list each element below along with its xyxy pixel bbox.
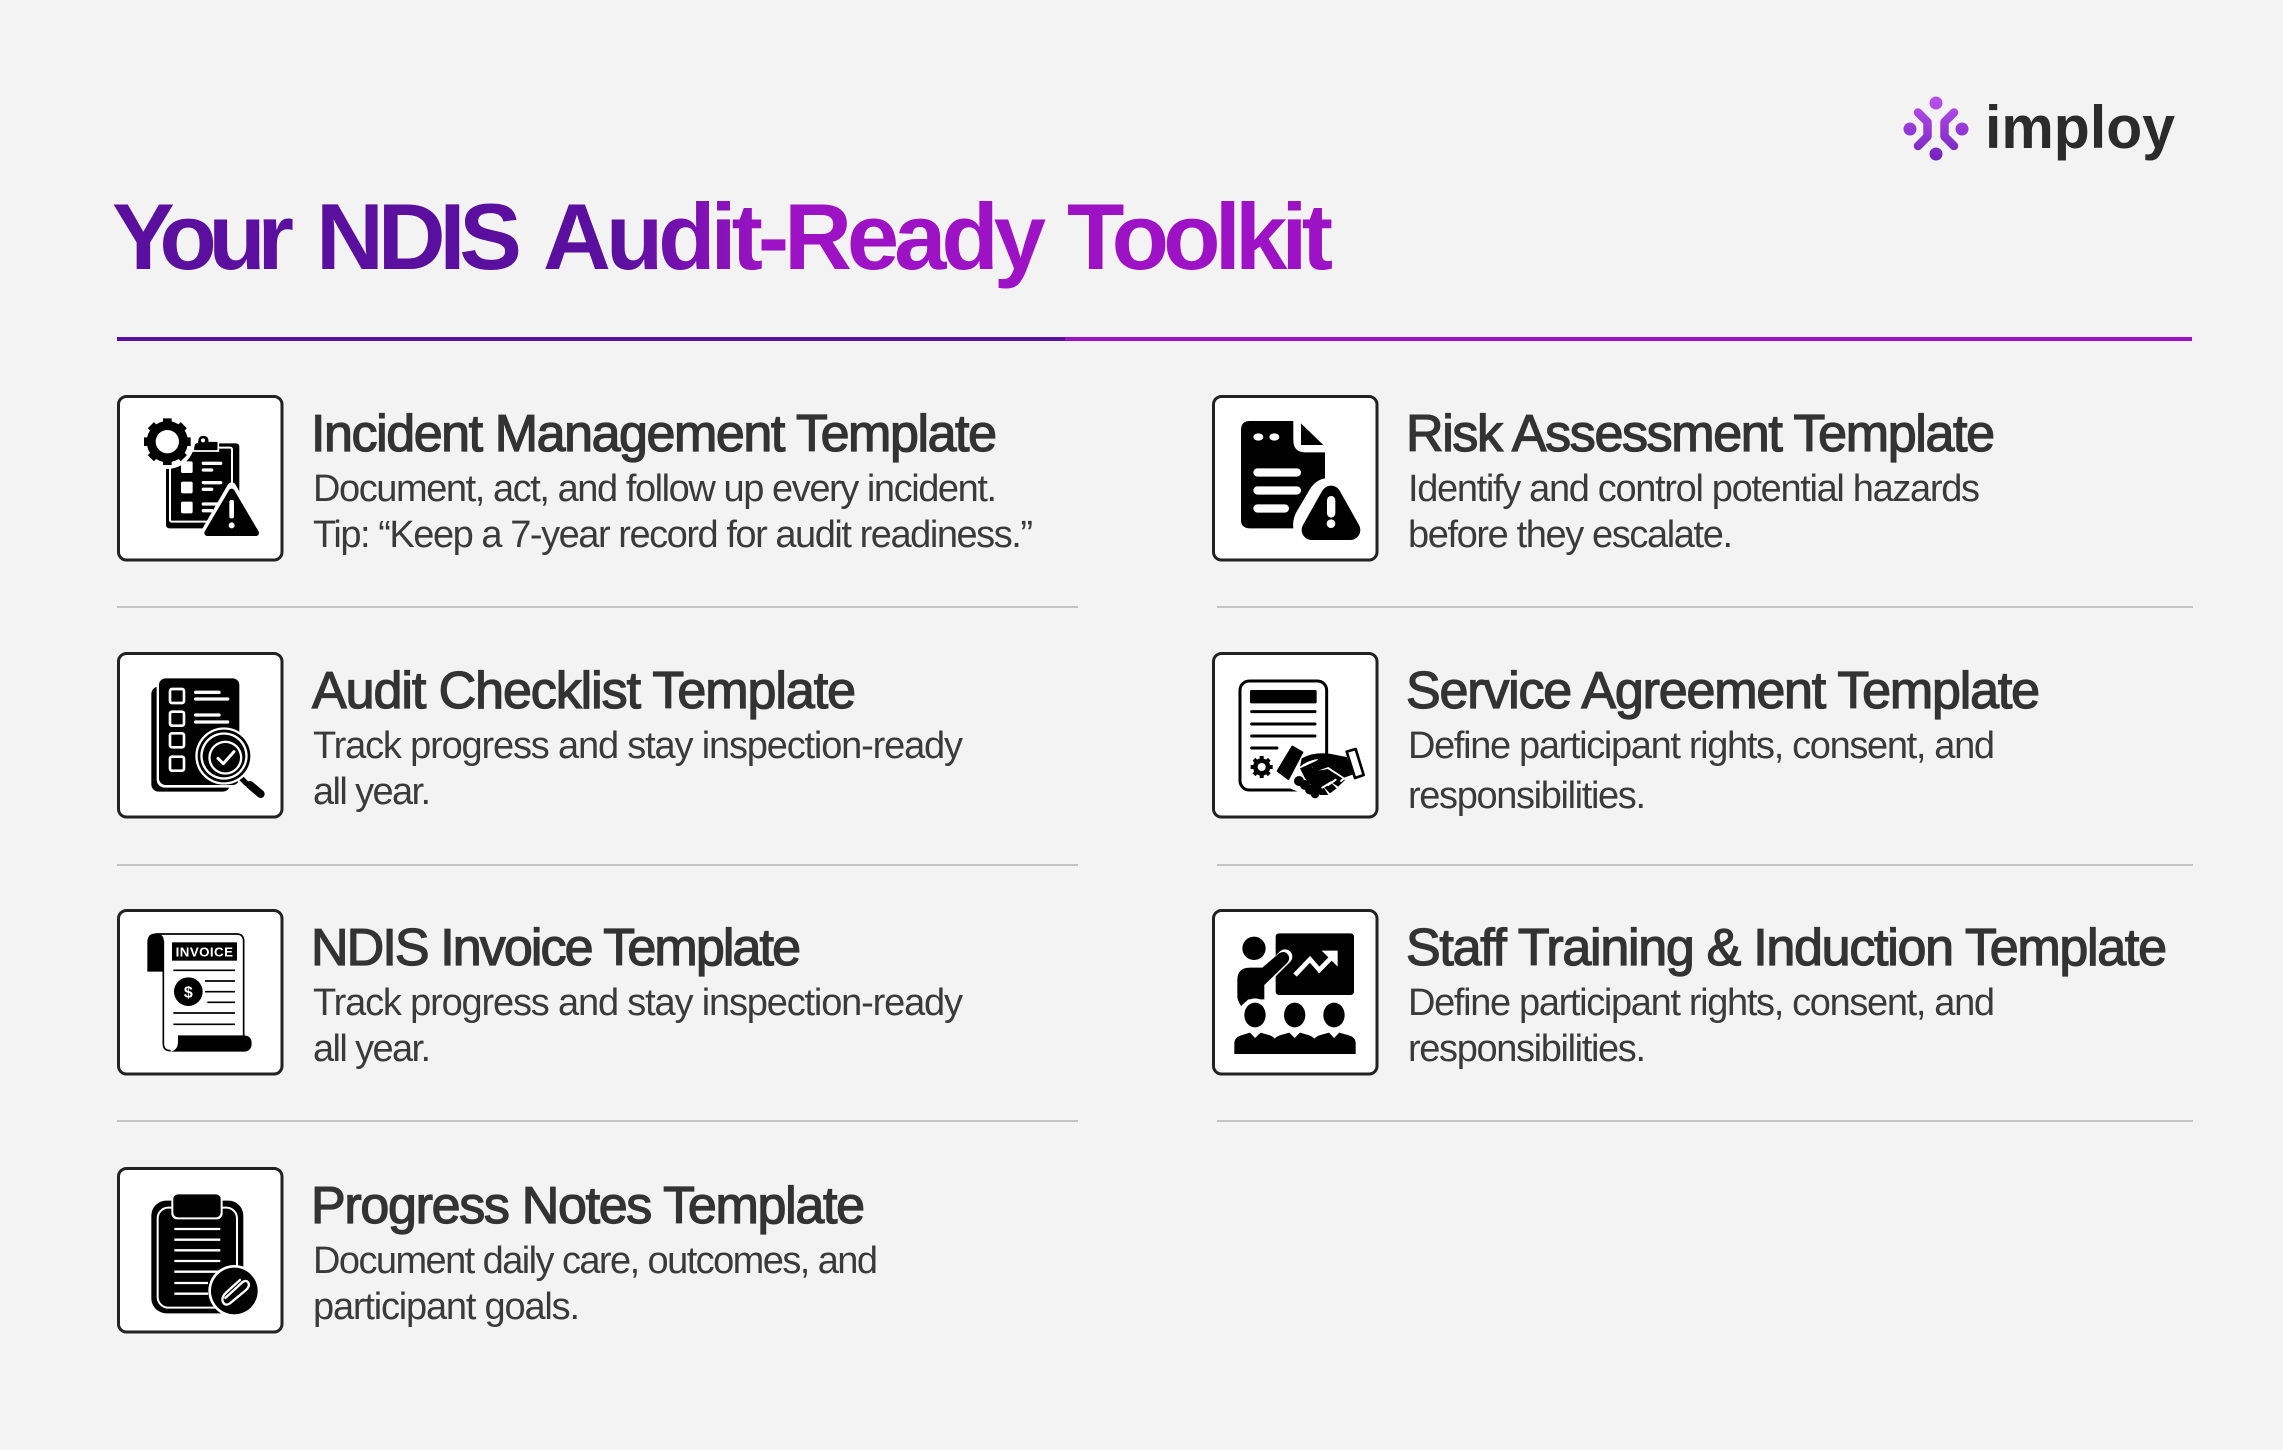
logo wordmark: imploy bbox=[1985, 94, 2176, 161]
icon: checklist magnifier bbox=[151, 676, 261, 794]
panel: staff training & induction template bbox=[1214, 910, 2167, 1074]
description bbox=[313, 1240, 878, 1328]
description: Identify and control potential hazards bbox=[1408, 468, 1980, 510]
heading: Risk Assessment Template bbox=[1406, 405, 1995, 463]
title: Your bbox=[112, 184, 294, 289]
description: Document, act, and follow up every incident. bbox=[313, 468, 997, 510]
icon box: risk bbox=[1214, 396, 1377, 560]
heading: Audit Checklist Template bbox=[312, 662, 856, 720]
dollar symbol: $ bbox=[184, 984, 193, 1001]
description: all year. bbox=[313, 771, 431, 813]
description: participant goals. bbox=[313, 1286, 580, 1328]
description: Define participant rights, consent, and bbox=[1408, 982, 1995, 1024]
description bbox=[1408, 725, 1995, 817]
description: before they escalate. bbox=[1408, 514, 1733, 556]
icon box: incident bbox=[118, 396, 282, 560]
title: Toolkit bbox=[1067, 184, 1333, 289]
description: Tip: “Keep a 7-year record for audit readiness.” bbox=[313, 514, 1033, 556]
description: Track progress and stay inspection-ready bbox=[313, 725, 963, 767]
title: NDIS bbox=[316, 184, 522, 289]
description: Track progress and stay inspection-ready bbox=[313, 982, 963, 1024]
description: responsibilities. bbox=[1408, 1028, 1646, 1070]
description bbox=[313, 982, 963, 1070]
description bbox=[313, 468, 1033, 556]
description: Document daily care, outcomes, and bbox=[313, 1240, 878, 1282]
icon: invoice scroll bbox=[147, 933, 252, 1052]
icon box: training bbox=[1214, 910, 1377, 1074]
panel: audit checklist template bbox=[118, 654, 963, 817]
description bbox=[313, 725, 963, 813]
icon: presenter and audience bbox=[1234, 933, 1356, 1054]
title bbox=[112, 184, 1333, 289]
icon: gear clipboard warning bbox=[140, 414, 260, 536]
description: all year. bbox=[313, 1028, 431, 1070]
icon box: agreement bbox=[1214, 654, 1377, 817]
heading: NDIS Invoice Template bbox=[311, 919, 801, 977]
heading: Service Agreement Template bbox=[1406, 662, 2040, 720]
panel: ndis invoice template bbox=[118, 910, 963, 1074]
logo: imploy bbox=[1904, 94, 2176, 161]
description: Define participant rights, consent, and bbox=[1408, 725, 1995, 767]
icon: agreement handshake bbox=[1240, 681, 1370, 802]
panel: progress notes template bbox=[118, 1168, 878, 1332]
title underline bbox=[117, 337, 2192, 341]
panel: service agreement template bbox=[1214, 654, 2040, 817]
icon: logo mark bbox=[1904, 96, 1968, 160]
icon box: notes bbox=[118, 1168, 282, 1332]
icon: document warning bbox=[1241, 421, 1350, 530]
heading: Staff Training & Induction Template bbox=[1406, 919, 2167, 977]
icon: clipboard paperclip bbox=[151, 1192, 260, 1317]
invoice label: INVOICE bbox=[176, 944, 233, 959]
icon box: invoice bbox=[118, 910, 282, 1074]
title: Audit-Ready bbox=[543, 184, 1046, 289]
description: responsibilities. bbox=[1408, 775, 1646, 817]
panel: risk assessment template bbox=[1214, 396, 1995, 560]
icon box: audit bbox=[118, 654, 282, 817]
heading: Incident Management Template bbox=[311, 405, 997, 463]
description bbox=[1408, 468, 1980, 556]
panel: incident management template bbox=[118, 396, 1033, 560]
description bbox=[1408, 982, 1995, 1070]
heading: Progress Notes Template bbox=[311, 1177, 865, 1235]
